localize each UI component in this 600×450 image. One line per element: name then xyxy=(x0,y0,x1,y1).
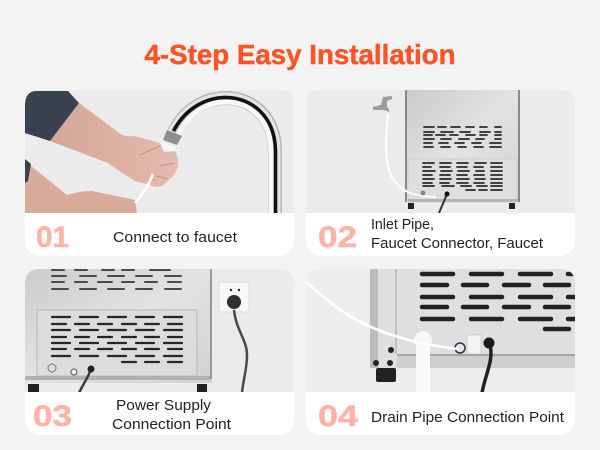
photo: close-up of drain pipe connection xyxy=(306,269,576,394)
caption: Power Supply xyxy=(116,398,212,414)
photo: machine rear with power cord and wall socket xyxy=(25,269,294,393)
step number 01: 01 xyxy=(36,221,69,254)
caption: Connection Point xyxy=(112,417,231,433)
panel: step 2 inlet pipe xyxy=(306,90,575,256)
step number 02: 02 xyxy=(318,221,357,254)
caption: Inlet Pipe, xyxy=(371,217,434,233)
panel: step 3 power supply xyxy=(25,269,294,435)
caption xyxy=(112,398,231,433)
photo: hands attaching hose to faucet xyxy=(25,90,294,214)
caption: Faucet Connector, Faucet xyxy=(371,236,543,252)
caption: Connect to faucet xyxy=(113,230,237,246)
caption xyxy=(371,217,543,252)
panel: step 4 drain pipe xyxy=(306,269,576,435)
step number 04: 04 xyxy=(318,400,358,433)
title: 4-Step Easy Installation xyxy=(144,39,456,70)
panel: step 1 connect to faucet xyxy=(25,90,294,256)
photo: machine rear with faucet and inlet hose xyxy=(306,90,575,213)
step number 03: 03 xyxy=(33,400,72,433)
caption: Drain Pipe Connection Point xyxy=(371,410,564,426)
